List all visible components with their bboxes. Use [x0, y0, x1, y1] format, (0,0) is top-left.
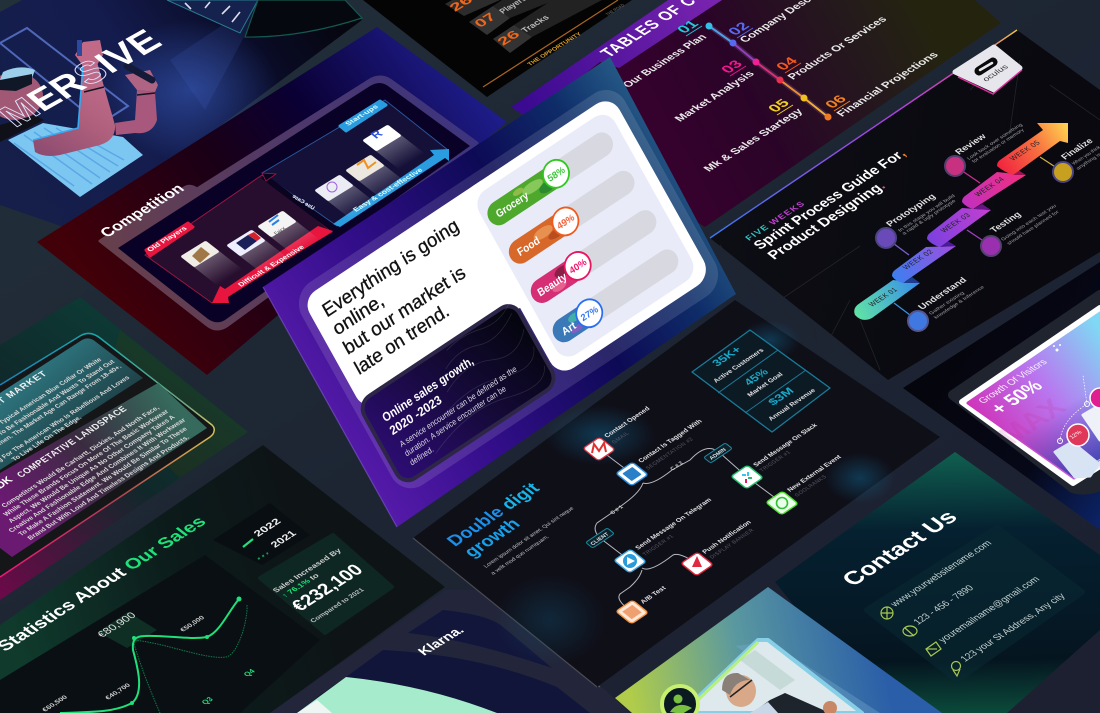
chart: timeline [706, 22, 832, 120]
labels: sprint stages: Understand [916, 276, 969, 311]
panel: the opportunity slide [363, 0, 632, 97]
labels: sprint stages: anything is [1075, 152, 1100, 171]
card: key metrics: Market Goal [746, 371, 785, 398]
bar: food: Food [516, 235, 542, 259]
labels: sprint stages: should have planned for [1006, 210, 1061, 246]
bar: food: 49% [555, 212, 577, 232]
logo: klarna: Klarna. [415, 624, 467, 658]
icon: constellation dome [167, 0, 362, 37]
icon: logo tiles [180, 211, 320, 285]
card: growth of visitors: MAX [991, 394, 1074, 449]
card: key metrics: 35K+ [710, 345, 744, 369]
heading: headline: online, [329, 290, 388, 340]
list: agenda items: 05 [764, 96, 793, 115]
bar: art: Art [560, 320, 578, 338]
list: agenda items: 06 [821, 92, 850, 111]
labels: sprint stages: Gather existing [928, 291, 966, 316]
chart: sales line chart: Q4 [241, 667, 258, 678]
card: growth of visitors [953, 295, 1100, 490]
heading: competative landspace: COMPETATIVE LANDSPACE [15, 404, 130, 480]
labels: sprint stages: knowledge & Inference [933, 285, 986, 320]
card: contact details: youremailname@gmail.com [937, 575, 1043, 645]
chart panel background [0, 555, 320, 713]
card: key metrics: $3M [766, 386, 797, 408]
text: competitive landscape body: To Make A Fashion Statement. We Would Be Similar To These [17, 426, 189, 538]
chart: workflow connectors [595, 448, 782, 612]
section: old players: Old Players [146, 226, 189, 253]
icon: user badge [662, 686, 698, 713]
card: contact details: 123 your St Address, Any city [959, 592, 1068, 664]
heading: headline: Everything is going [319, 215, 463, 322]
text: competitive landscape body: Creative And Fashionable Edge And Combines It With Workwear [8, 417, 188, 534]
heading: competition: Competition [97, 182, 188, 240]
legend: 2022 [252, 517, 284, 539]
labels: connector tags [586, 443, 732, 548]
card: growth of visitors: + 50% [986, 377, 1048, 418]
list: agenda items: 02 [724, 19, 753, 38]
logo: oculus tile [955, 47, 1022, 94]
card: bars panel [458, 94, 712, 378]
title: sprint process guide: Product Designing. [765, 179, 889, 262]
labels: connector tags: C # 1 [609, 505, 625, 516]
chart: week ribbon arrow: WEEK 03 [939, 211, 972, 234]
text: definition: A service encounter can be defined as the [398, 363, 519, 449]
panel: tables of content slide [511, 0, 1001, 227]
heading: double digit growth: growth [460, 515, 524, 560]
row: number tiles [445, 0, 602, 53]
card: sales increased [260, 535, 392, 633]
heading: the opportunity: THE OPPORTUNITY [527, 32, 583, 67]
chart: week ribbon arrow: WEEK 05 [1008, 139, 1042, 162]
bar: beauty [525, 203, 661, 308]
list: agenda items: Mk & Sales Startegy [701, 106, 807, 174]
labels: sprint stages: Finalize [1059, 136, 1095, 161]
legend: 2021 [269, 529, 300, 550]
title: sprint process guide: Sprint Process Guide For, [751, 147, 910, 252]
chart: week ribbon arrow: WEEK 04 [973, 175, 1006, 198]
list: agenda items [620, 0, 941, 174]
row: number tiles: 07 [471, 10, 499, 30]
bar: art [548, 243, 683, 348]
card: contact details: www.yourwebsitename.com [888, 539, 995, 609]
text: competitive landscape body: While These Brands Focus On More Of The Basic Workwear [2, 409, 171, 518]
card: headline [302, 172, 556, 411]
labels: sprint stages [884, 122, 1100, 320]
card: key metrics: Active Customers [712, 347, 766, 384]
chart: week ribbon arrow [854, 123, 1073, 331]
chart: sales line chart: €80,900 [96, 611, 139, 640]
labels: workflow nodes: GMAIL [611, 431, 631, 445]
card: key metrics: Annual Revenue [767, 387, 818, 422]
labels: connector tags: C # 2 [669, 461, 685, 472]
bar: art: 27% [579, 304, 601, 324]
chart: sales line chart: €50,000 [179, 615, 207, 633]
icon: workflow tiles [583, 437, 798, 624]
labels: workflow nodes: SEGMENTATION #2 [645, 437, 695, 471]
section: start-ups [262, 100, 449, 228]
heading: headline: late on trend. [351, 300, 453, 380]
panel: competition slide [37, 27, 507, 375]
labels: connector tags: CLIENT [590, 532, 611, 547]
labels: workflow nodes: GOOLRANKS [794, 474, 828, 498]
list: agenda items: Our Business Plan [620, 32, 710, 90]
panel: the opportunity slide: THE ROAD [605, 3, 627, 17]
chart: week ribbon arrow: WEEK 01 [867, 286, 900, 308]
list: agenda items: 03 [717, 57, 746, 76]
labels: workflow nodes: TRIGGER #1 [759, 450, 793, 473]
panel: immersive VR slide [0, 0, 362, 232]
panel: klarna slide [270, 590, 630, 713]
chart: week ribbon arrow: WEEK 02 [901, 248, 935, 271]
card: market text [0, 333, 215, 577]
section: old players: Difficult & Expensive [237, 244, 306, 288]
panel: contact us slide [775, 452, 1100, 713]
card: key metrics: 45% [742, 367, 771, 388]
section: old players [145, 175, 333, 303]
logo: oculus tile: oculus [981, 63, 1010, 83]
bar: grocery [482, 126, 618, 230]
chart: sales line chart: €40,700 [104, 682, 133, 701]
heading: online sales growth: 2020 -2023 [387, 393, 444, 438]
heading: online sales growth: Online sales growth, [380, 354, 476, 425]
heading: headline [319, 215, 495, 380]
bars: visitor columns [1055, 388, 1100, 477]
chart: sales line chart: €60,500 [41, 694, 70, 713]
card: contact details [867, 528, 1082, 680]
labels: sprint stages: Going into each test you [1000, 203, 1058, 242]
heading: headline: but our market is [340, 262, 469, 359]
labels: workflow nodes: Contact Is Tagged With [637, 418, 704, 464]
card: online sales growth [358, 301, 558, 486]
list: agenda items: Market Analysis [672, 69, 757, 124]
list: agenda items: Products Or Services [785, 15, 890, 82]
chart: sales line chart [41, 596, 258, 713]
bar: beauty: 40% [568, 256, 589, 277]
arrow: use case [262, 173, 332, 228]
panel: double digit growth slide [413, 300, 940, 687]
labels: workflow nodes: A/B Test [639, 585, 669, 605]
card: sales increased: Sales Increased By [270, 546, 344, 594]
labels: sprint stages: Testing [988, 210, 1023, 234]
text: competitive landscape body: Competitors Would Be Carhartt, Dickies, And North Face, [1, 405, 161, 509]
card: sales increased: Compared to 2021 [309, 587, 366, 624]
panel: statistics slide [0, 445, 445, 713]
icon: logo tiles: FairX [273, 226, 288, 236]
icon: logo tiles: R [367, 127, 386, 141]
section: start-ups: Start-ups [344, 104, 381, 127]
labels: workflow nodes: Contact Opened [603, 406, 652, 439]
row: number tiles: Tracks [519, 13, 551, 34]
figure: person with headset [0, 40, 158, 197]
panel: photo slide [615, 587, 942, 713]
labels: workflow nodes: Push Notification [701, 520, 753, 555]
card: sales increased: ↑ 76.1% to [279, 571, 321, 599]
frame: competition board [100, 77, 477, 329]
shape: mint arc [297, 677, 497, 713]
section: start-ups: Easy & cost-effective [352, 167, 425, 213]
legend [243, 517, 300, 559]
row: number tiles: 26 [494, 28, 523, 48]
bar: beauty: Beauty [536, 270, 570, 299]
card: key metrics [692, 330, 830, 432]
labels: sprint stages: for evaluation or memory [971, 127, 1026, 164]
labels: sprint stages: a rapid & ugly prototype [901, 199, 958, 236]
text: competitive landscape body: Brand But With Loud And Timeless Designs And Products. [26, 435, 191, 541]
text: definition: duration. A service encounter can be [403, 383, 508, 458]
text: target market body: To Live Life On The Edge. [11, 415, 84, 463]
heading: contact us: Contact Us [836, 506, 963, 590]
icon: contact glyphs [881, 607, 960, 676]
labels: workflow nodes: New External Event [786, 454, 844, 493]
list: agenda items: 01 [673, 17, 702, 36]
icon: logo tiles [314, 125, 425, 219]
labels: sprint stages: Review [953, 132, 988, 156]
panel: growth of visitors slide [903, 262, 1100, 530]
photo: businessman [690, 640, 880, 713]
card: growth of visitors: Growth Of Visitors [976, 358, 1050, 406]
panel: featured slide, everything is going online [263, 57, 736, 527]
text: competitive landscape body: Aspect, We Would Be Unique As No Other Company Takes A [7, 414, 177, 524]
arrow: use case: Use Case [291, 194, 315, 212]
panel: market slide [0, 297, 248, 600]
labels: workflow nodes: TRIGGER #1 [642, 534, 676, 557]
bars: visitor columns: WEEK [1080, 465, 1098, 477]
labels: workflow nodes: Send Message On Telegram [634, 497, 714, 551]
bar: grocery: Grocery [494, 189, 531, 221]
text: definition: defined. [408, 444, 435, 468]
card: sales increased: €232,100 [287, 561, 368, 615]
labels: workflow nodes: Send Message On Slack [752, 422, 819, 468]
text: description: a velit mod quo numquam. [490, 534, 551, 576]
heading: double digit growth: Double digit [443, 479, 544, 549]
labels: sprint stages: Prototyping [884, 192, 938, 228]
bar: food [504, 165, 639, 270]
bars: visitor columns: 12% [1069, 430, 1084, 440]
labels: sprint stages: Look back over something [966, 122, 1024, 161]
labels: workflow nodes: DISPLAY BANNER [709, 528, 756, 560]
chart: sales line chart: Q3 [199, 695, 215, 706]
card: contact details: 123 - 456 - 7890 [912, 584, 977, 627]
labels: connector tags: ADMIN [708, 447, 728, 461]
heading: five weeks: FIVE WEEKS [743, 199, 808, 242]
labels: workflow nodes [603, 406, 844, 605]
list: agenda items: 04 [772, 54, 801, 73]
bar: grocery: 58% [546, 164, 568, 185]
list: agenda items: Financial Projections [834, 50, 941, 119]
labels: sprint stages: In this stage you will build [897, 193, 957, 233]
panel: five weeks sprint process slide [710, 30, 1100, 380]
text: description: Lorem ipsum dolor sit amet. Qui sint neque [483, 506, 576, 569]
